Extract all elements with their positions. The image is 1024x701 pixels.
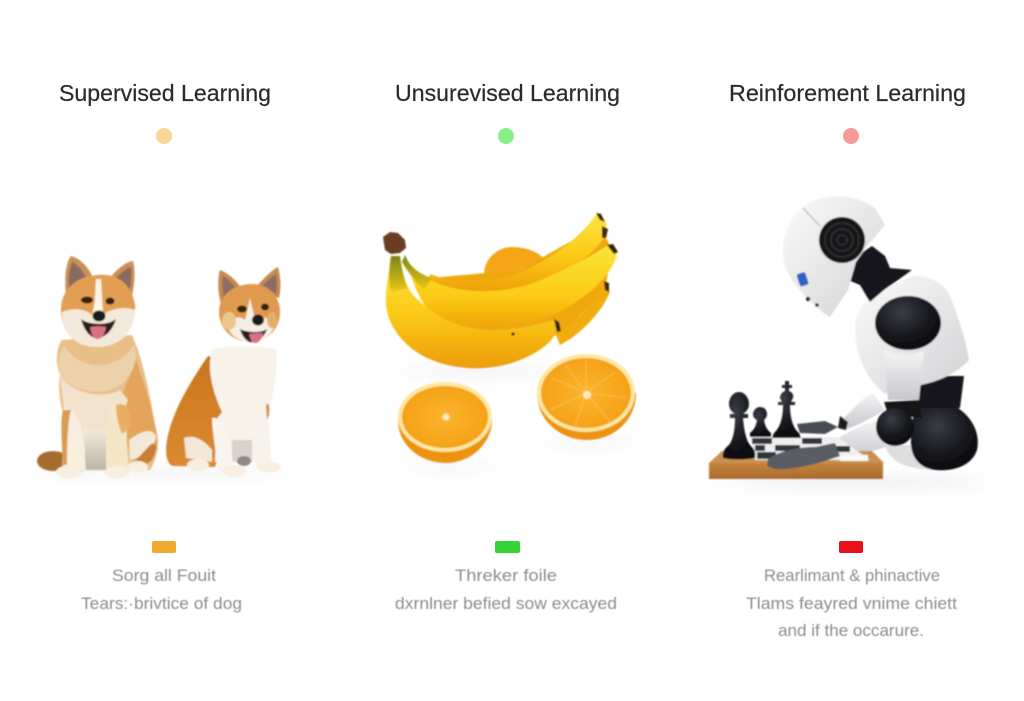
description: supervised: Sorg all Fouit <box>112 567 216 585</box>
description: reinforcement <box>746 567 957 640</box>
orange behind bananas <box>484 247 543 280</box>
description: supervised <box>81 567 242 613</box>
heading: reinforcement learning: Reinforement Learning <box>729 80 966 106</box>
illustration: bananas and oranges <box>383 213 640 470</box>
dog two <box>166 267 281 477</box>
dog one <box>37 256 158 478</box>
status dot: amber <box>156 128 172 144</box>
upper arm <box>884 350 924 400</box>
banana stem cap <box>383 232 406 254</box>
floor shadow <box>730 478 990 486</box>
marker: red bar <box>839 541 863 553</box>
heading: unsupervised learning: Unsurevised Learning <box>395 80 620 106</box>
illustration: robot playing chess <box>709 197 990 486</box>
description: reinforcement: Rearlimant & phinactive <box>764 567 940 585</box>
status dot: green <box>498 128 514 144</box>
marker: amber bar <box>152 541 176 553</box>
description: supervised: Tears:·brivtice of dog <box>81 595 242 613</box>
middle banana <box>405 245 617 330</box>
status dot: red <box>843 128 859 144</box>
front banana <box>386 256 559 368</box>
orange half left <box>398 382 492 463</box>
shoulder joint <box>875 296 941 350</box>
robot hand <box>767 443 840 469</box>
panel: supervised learning <box>35 80 285 613</box>
description: unsupervised <box>395 567 617 613</box>
back banana <box>556 281 610 345</box>
robot lower body <box>885 376 978 470</box>
far arm <box>797 393 885 434</box>
chess board <box>709 437 884 479</box>
chess piece: pawn <box>750 407 771 437</box>
chess piece: king <box>772 381 801 438</box>
panel: reinforcement learning <box>709 80 990 640</box>
banana underlay <box>430 225 612 355</box>
blue sensor <box>796 272 809 287</box>
description: reinforcement: Tlams feayred vnime chiett <box>746 595 957 613</box>
ear speaker <box>819 217 865 263</box>
panel: unsupervised learning <box>383 80 640 613</box>
ground shadow <box>35 470 285 476</box>
heading: supervised learning: Supervised Learning <box>59 80 271 106</box>
description: unsupervised: Threker foile <box>455 567 557 585</box>
orange half right <box>537 354 636 440</box>
description: reinforcement: and if the occarure. <box>778 622 924 640</box>
soft shadows <box>395 367 640 470</box>
chess piece: bishop <box>723 392 755 460</box>
marker: green bar <box>495 541 520 553</box>
description: unsupervised: dxrnlner befied sow excayed <box>395 595 617 613</box>
head <box>783 197 885 317</box>
neck <box>848 246 912 302</box>
top banana <box>428 213 607 295</box>
illustration: two dogs <box>35 256 285 478</box>
near arm <box>829 400 922 460</box>
torso <box>855 276 969 394</box>
